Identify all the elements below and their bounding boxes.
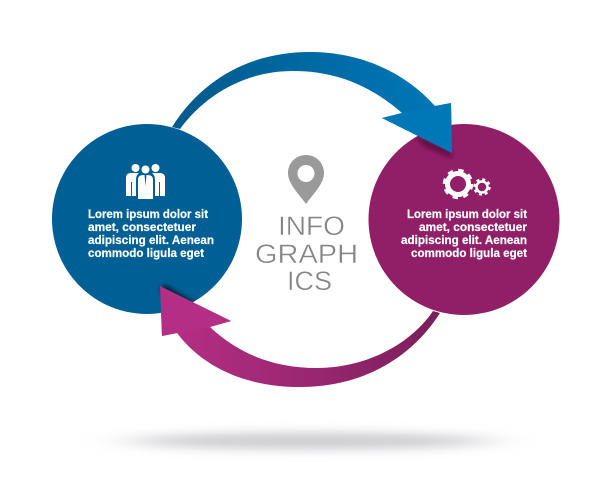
arrow head overlay: purple [160, 286, 231, 336]
ground shadow [130, 432, 490, 450]
text block: right [401, 209, 528, 260]
text block: right: amet, consectetuer [419, 222, 528, 234]
text block: left: commodo ligula eget [88, 248, 204, 260]
panel: right purple circle [368, 124, 560, 315]
text block: right: adipiscing elit. Aenean [401, 235, 527, 247]
text block: left: adipiscing elit. Aenean [88, 235, 214, 247]
infographic canvas [52, 52, 560, 454]
icon: location pin [288, 155, 324, 204]
shadow: purple arrowhead on blue circle [158, 282, 196, 302]
arrow: bottom purple arc [160, 286, 440, 387]
heading: INFO GRAPH ICS: GRAPH [255, 239, 358, 269]
text block: right: Lorem ipsum dolor sit [407, 209, 527, 221]
icon: gears [444, 170, 490, 198]
icon: team of people [126, 164, 165, 199]
heading: INFO GRAPH ICS: INFO [278, 211, 345, 241]
shadow: blue arrowhead on purple circle [414, 134, 452, 158]
text block: left: amet, consectetuer [88, 222, 197, 234]
arrow: top blue arc [172, 52, 452, 153]
text block: right: commodo ligula eget [411, 248, 527, 260]
text block: left: Lorem ipsum dolor sit [88, 209, 208, 221]
text block: left [88, 209, 214, 260]
heading: INFO GRAPH ICS [255, 211, 358, 296]
heading: INFO GRAPH ICS: ICS [287, 266, 332, 296]
panel: left blue circle [52, 124, 242, 314]
arrow head overlay: blue [382, 103, 452, 153]
